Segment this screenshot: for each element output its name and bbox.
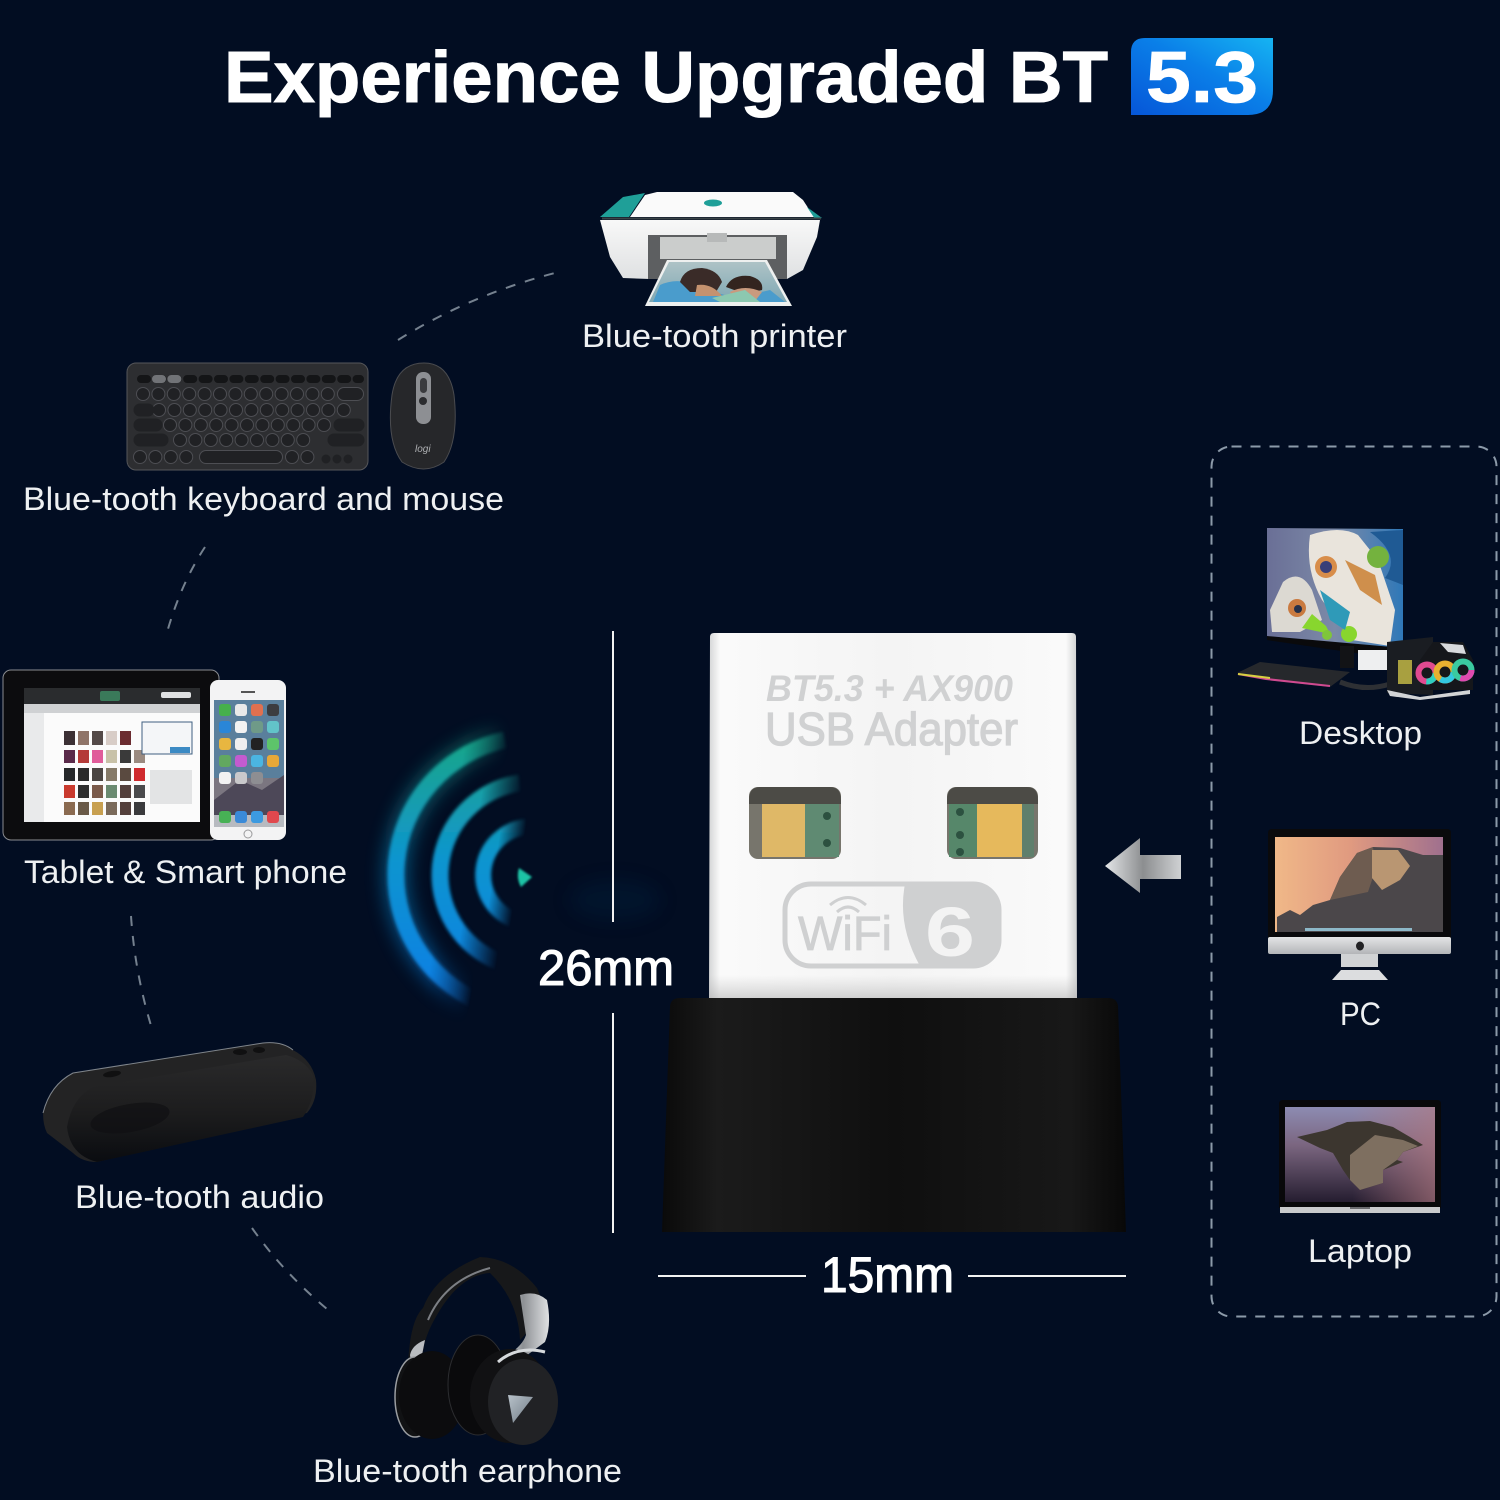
plug shadow bbox=[709, 975, 1077, 1000]
icon: smartphone bbox=[210, 680, 286, 840]
inner arc bbox=[483, 827, 527, 920]
icon: headphones bbox=[395, 1257, 558, 1445]
left contact window bbox=[749, 787, 841, 859]
icon: mouse: logi bbox=[415, 444, 431, 455]
desktop device bbox=[1237, 528, 1473, 751]
title bbox=[224, 38, 1273, 118]
label: earphone: Blue-tooth earphone bbox=[313, 1453, 622, 1489]
icon: laptop bbox=[1279, 1100, 1441, 1213]
width line left bbox=[658, 1275, 806, 1277]
label: desktop: Desktop bbox=[1299, 715, 1422, 751]
right contact window bbox=[947, 787, 1038, 859]
icon: gaming desktop bbox=[1237, 528, 1473, 700]
printer device bbox=[582, 192, 847, 354]
label: printer: Blue-tooth printer bbox=[582, 318, 847, 354]
adapter printed text bbox=[765, 668, 1018, 755]
WiFi 6 logo: 6 bbox=[925, 893, 975, 971]
icon: mouse bbox=[390, 363, 455, 469]
signal center bbox=[518, 868, 532, 887]
speaker device bbox=[43, 1043, 324, 1215]
width label: 15mm bbox=[821, 1247, 954, 1303]
label: laptop: Laptop bbox=[1308, 1233, 1412, 1269]
outer arc bbox=[396, 740, 505, 1002]
USB adapter bbox=[662, 633, 1126, 1232]
adapter printed text: USB Adapter bbox=[765, 703, 1018, 755]
WiFi 6 logo bbox=[785, 884, 999, 971]
icon: all-in-one PC bbox=[1268, 829, 1451, 980]
label: tablet and smart phone: Tablet & Smart phone bbox=[24, 854, 347, 890]
tablet and phone device bbox=[3, 670, 347, 890]
icon: printer bbox=[600, 192, 822, 306]
keyboard and mouse device bbox=[23, 363, 504, 517]
dashed frame bbox=[1212, 446, 1496, 1316]
faint glow bbox=[570, 880, 660, 920]
icon: bluetooth speaker bbox=[43, 1043, 316, 1162]
width line right bbox=[968, 1275, 1126, 1277]
height line top bbox=[612, 631, 614, 922]
PC device bbox=[1268, 829, 1451, 1032]
label: audio: Blue-tooth audio bbox=[75, 1179, 324, 1215]
icon: tablet bbox=[3, 670, 219, 840]
icon: keyboard bbox=[127, 363, 368, 470]
label: keyboard and mouse: Blue-tooth keyboard and mouse bbox=[23, 481, 504, 517]
adapter printed text: BT5.3 + AX900 bbox=[766, 668, 1013, 709]
height label: 26mm bbox=[538, 940, 674, 996]
adapter black base bbox=[662, 998, 1126, 1232]
label: PC: PC bbox=[1340, 996, 1381, 1032]
adapter metal plug bbox=[709, 633, 1077, 1000]
icon: wireless signal waves bbox=[396, 740, 532, 1002]
version badge: 5.3 bbox=[1146, 38, 1258, 118]
WiFi 6 logo: WiFi bbox=[798, 908, 892, 961]
height line bottom bbox=[612, 1013, 614, 1233]
dashed connectors bbox=[131, 273, 555, 1314]
panel: compatible computers bbox=[1212, 446, 1496, 1316]
earphone device bbox=[313, 1257, 622, 1489]
laptop device bbox=[1279, 1100, 1441, 1269]
heading text: Experience Upgraded BT bbox=[224, 38, 1108, 118]
arrow pointing to adapter bbox=[1105, 838, 1181, 893]
middle arc bbox=[440, 783, 520, 962]
signal glow bbox=[396, 740, 505, 1002]
